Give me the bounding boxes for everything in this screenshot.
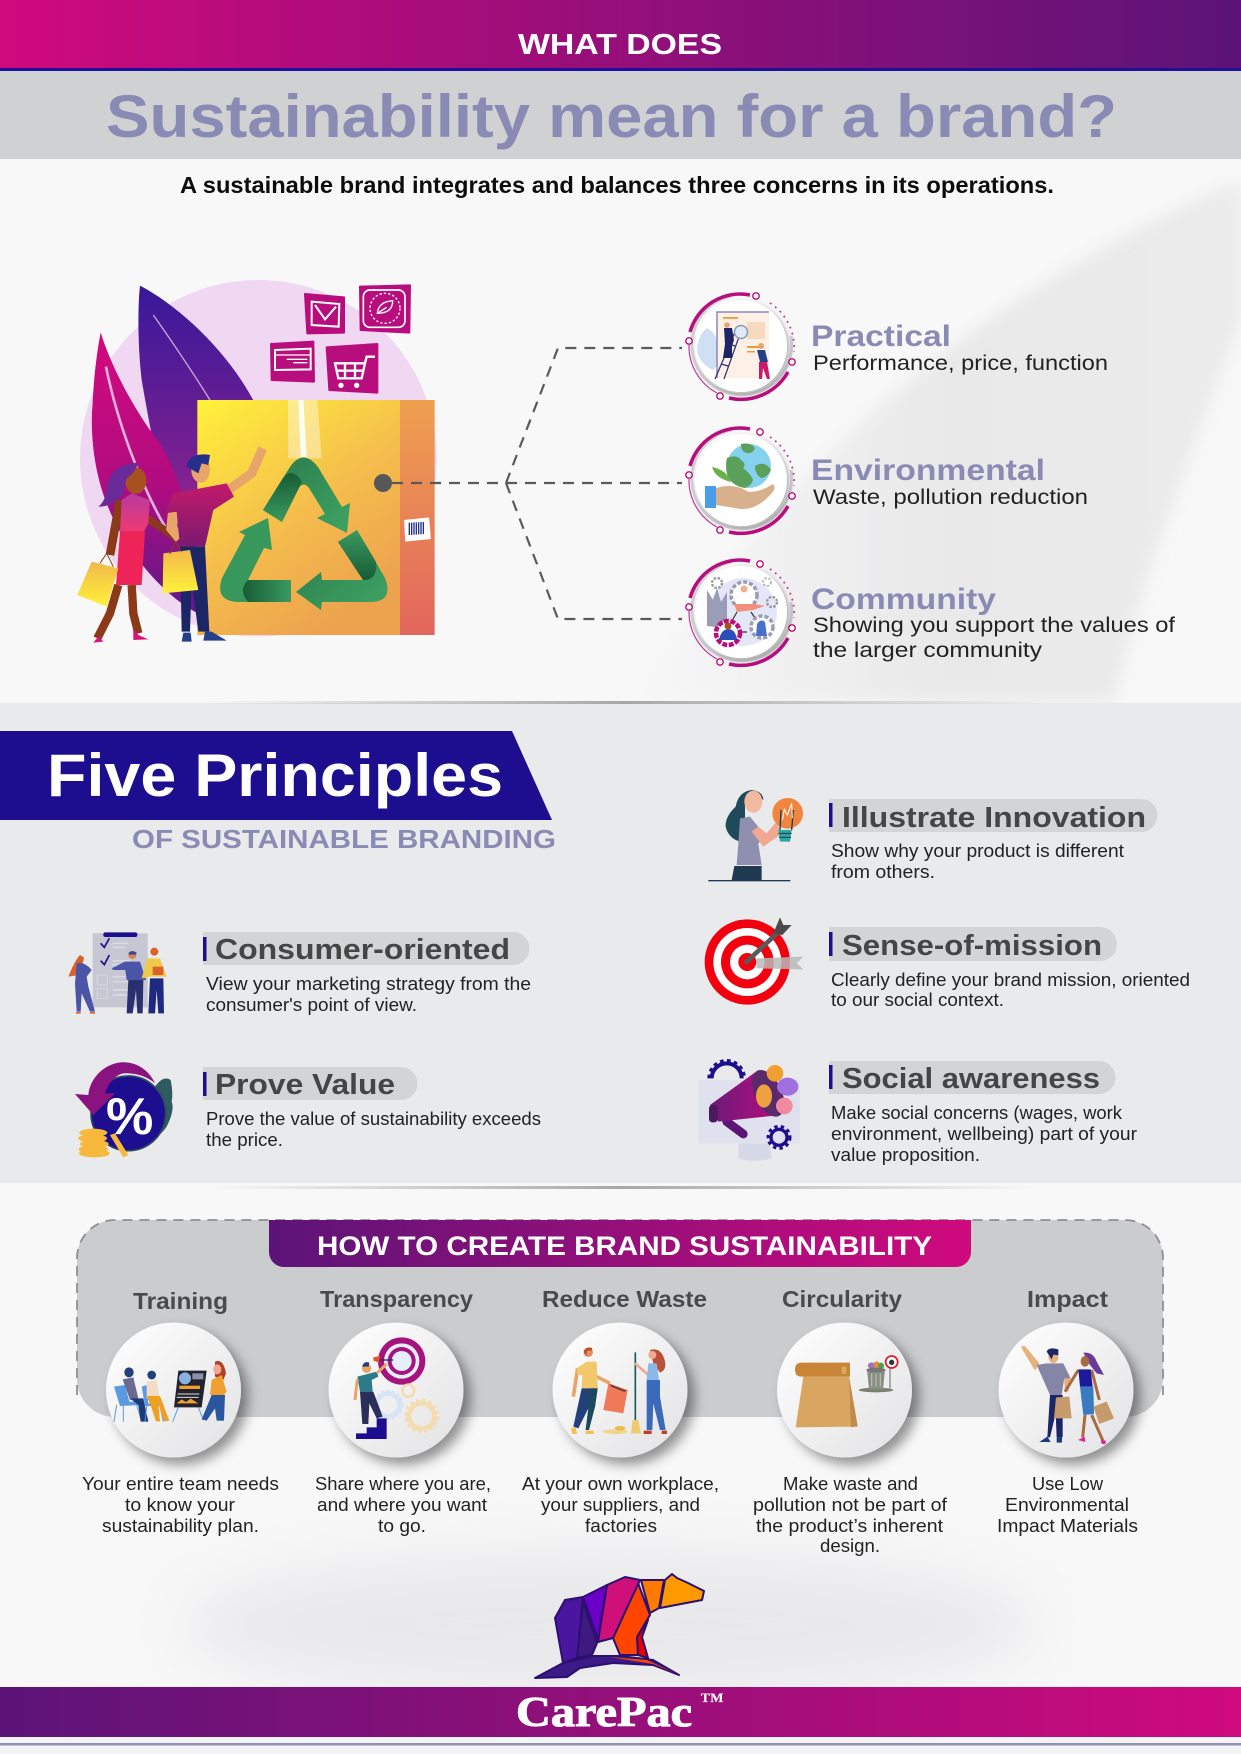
principle: sense of mission: Sense-of-mission: [842, 930, 1102, 962]
principle: illustrate innovation: Illustrate Innovation: [842, 802, 1146, 834]
icon: purple leaf: [138, 286, 257, 613]
icon: yellow bag left: [77, 562, 118, 607]
label: community: the larger community: [813, 638, 1042, 662]
heading: five principles: [0, 731, 556, 854]
label: community: Community: [811, 583, 996, 616]
principle: consumer-oriented: Consumer-oriented: [215, 934, 510, 966]
icon: paper bag and bin: [795, 1356, 898, 1427]
label: practical: [811, 320, 1108, 375]
step text: to know your: [125, 1494, 235, 1515]
title band: [0, 71, 1241, 159]
ring icon: environmental: [686, 428, 795, 533]
panel header: [269, 1220, 971, 1267]
icon: team meeting: [114, 1361, 227, 1422]
step text: Make waste and: [783, 1473, 918, 1494]
principle: social awareness: environment, wellbeing) part of your: [831, 1123, 1137, 1144]
step: transparency: Transparency: [320, 1286, 473, 1312]
icon: couple with shopping bags: [1021, 1346, 1114, 1444]
step text: and where you want: [317, 1494, 487, 1515]
subtitle: A sustainable brand integrates and balances three concerns in its operations.: [180, 172, 1054, 198]
section shadow line top: [200, 701, 1050, 704]
background: middle section: [0, 703, 1241, 1183]
icon: people cleaning up: [571, 1347, 667, 1434]
icon: megaphone on screen: [698, 1061, 800, 1161]
step text: [315, 1473, 491, 1536]
icon: target with arrow: [705, 917, 803, 1005]
label: practical: Practical: [811, 320, 951, 353]
icon: web panel with ladder: [697, 312, 770, 379]
principle: consumer-oriented: View your marketing strategy from the: [206, 973, 531, 994]
principle: prove value: Prove Value: [215, 1069, 395, 1101]
step text: your suppliers, and: [541, 1494, 700, 1515]
principle: consumer-oriented: [203, 932, 531, 1015]
principle: illustrate innovation: [829, 799, 1158, 882]
step text: Your entire team needs: [82, 1473, 279, 1494]
principle: illustrate innovation: Show why your product is different: [831, 840, 1124, 861]
step: training: Training: [133, 1288, 228, 1314]
principle: sense of mission: [829, 927, 1190, 1010]
icon: magenta leaf: [92, 332, 199, 613]
step: circularity: [753, 1286, 948, 1556]
footer rule: [0, 1743, 1241, 1746]
title: Sustainability mean for a brand?: [106, 83, 1117, 150]
step text: to go.: [378, 1515, 426, 1536]
icon: gears and people network: [707, 578, 777, 646]
step: reduce waste: Reduce Waste: [542, 1286, 707, 1312]
connector: dashed tree: [374, 348, 682, 619]
principle: sense of mission: Clearly define your brand mission, oriented: [831, 969, 1190, 990]
step text: Environmental: [1005, 1494, 1129, 1515]
principle: prove value: Prove the value of sustainability exceeds: [206, 1108, 541, 1129]
icon: percent badge and coins: %: [106, 1087, 153, 1145]
step text: factories: [585, 1515, 657, 1536]
label: environmental: [811, 454, 1088, 509]
icon: cardboard box: [197, 400, 435, 635]
step text: Share where you are,: [315, 1473, 491, 1494]
principle: social awareness: value proposition.: [831, 1144, 980, 1165]
principle: prove value: the price.: [206, 1129, 283, 1150]
panel: how to create brand sustainability: [77, 1220, 1163, 1417]
icon: hand holding globe: [705, 444, 775, 509]
step text: [753, 1473, 948, 1556]
step text: pollution not be part of: [753, 1494, 948, 1515]
label: community: [811, 583, 1175, 662]
step text: [997, 1473, 1138, 1536]
ring icon: practical: [686, 293, 795, 399]
step text: design.: [820, 1535, 880, 1556]
step text: the product’s inherent: [756, 1515, 943, 1536]
step: circularity: Circularity: [782, 1286, 902, 1312]
brand name: CarePac: [516, 1690, 692, 1736]
step: reduce waste: [522, 1286, 719, 1536]
icon: woman with light bulb: [708, 790, 803, 881]
illustration: recycling box and shoppers: [77, 280, 437, 643]
icon: man shopper: [163, 448, 263, 642]
label: environmental: Waste, pollution reduction: [813, 485, 1088, 509]
principle: social awareness: [829, 1061, 1137, 1165]
principle: sense of mission: to our social context.: [831, 989, 1004, 1010]
principle: illustrate innovation: from others.: [831, 861, 935, 882]
step text: Impact Materials: [997, 1515, 1138, 1536]
panel header: HOW TO CREATE BRAND SUSTAINABILITY: [317, 1231, 932, 1261]
icon: woman shopper: [77, 463, 177, 643]
principle: social awareness: Social awareness: [842, 1063, 1100, 1095]
banner text: WHAT DOES: [518, 29, 722, 61]
step text: At your own workplace,: [522, 1473, 719, 1494]
step: transparency: [315, 1286, 491, 1536]
background swooshes: top section: [640, 180, 1241, 702]
footer bar: [0, 1687, 1241, 1737]
trademark: ™: [700, 1688, 724, 1713]
icon: people with checklist: [68, 932, 167, 1014]
step: impact: Impact: [1027, 1286, 1108, 1312]
sub heading: OF SUSTAINABLE BRANDING: [132, 824, 556, 854]
icon: person on steps aiming at target: [355, 1337, 438, 1439]
icon: yellow bag right: [163, 550, 198, 593]
step text: sustainability plan.: [102, 1515, 259, 1536]
principle: social awareness: Make social concerns (wages, work: [831, 1102, 1123, 1123]
icon: app tiles: [271, 285, 410, 393]
logo: polygon bear: [535, 1574, 704, 1678]
background swoosh: bottom section: [180, 1550, 1040, 1700]
section shadow line bottom: [205, 1186, 1040, 1189]
top banner: [0, 0, 1241, 72]
step text: [522, 1473, 719, 1536]
step text: Use Low: [1032, 1473, 1104, 1494]
icon: recycling arrows: [220, 457, 387, 610]
ring icon: community: [686, 560, 795, 665]
principle: prove value: [203, 1067, 541, 1150]
step text: [82, 1473, 279, 1536]
footer strip: [0, 1737, 1241, 1754]
principle: consumer-oriented: consumer's point of view.: [206, 994, 417, 1015]
label: community: Showing you support the values of: [813, 613, 1175, 637]
icon: percent badge and coins: [75, 1062, 173, 1157]
step: training: [82, 1288, 279, 1536]
heading: five principles: Five Principles: [47, 742, 503, 809]
step: impact: [997, 1286, 1138, 1536]
icon: barcode label: [405, 518, 430, 541]
label: environmental: Environmental: [811, 454, 1045, 487]
label: practical: Performance, price, function: [813, 351, 1108, 375]
